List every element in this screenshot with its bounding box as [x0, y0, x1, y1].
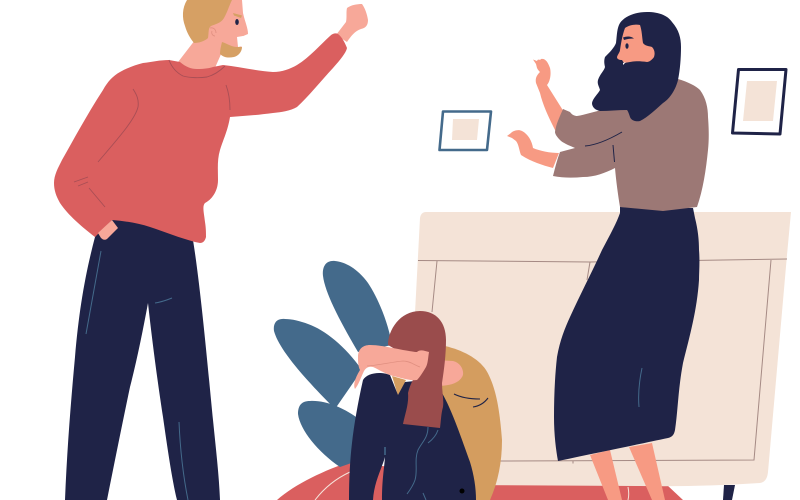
standing woman: skirt — [554, 207, 699, 461]
standing woman: legs — [590, 443, 665, 500]
seated woman: arms — [354, 345, 429, 389]
man: neck and face — [175, 0, 248, 72]
standing woman: top — [553, 79, 709, 211]
picture frame: navy — [732, 70, 786, 134]
standing woman: face — [617, 25, 655, 65]
seated woman: dark outfit — [349, 373, 476, 500]
man: raised fist — [336, 4, 368, 42]
sofa — [410, 212, 791, 486]
seated woman: hair — [388, 311, 446, 428]
bean bag — [430, 346, 502, 500]
man: beard — [220, 42, 242, 58]
angry man — [54, 0, 368, 500]
seated woman — [349, 311, 476, 500]
standing woman: hair — [592, 12, 681, 121]
standing woman — [507, 12, 709, 500]
plant leaves — [274, 261, 392, 467]
man: sweater — [54, 33, 347, 243]
man: hand in pocket — [98, 220, 118, 240]
man: eyebrow — [233, 13, 242, 18]
man: trousers — [65, 212, 220, 500]
sofa leg — [723, 485, 735, 500]
standing woman: lower arm — [507, 130, 559, 168]
standing woman: raised arm — [533, 59, 564, 132]
man: hair — [183, 0, 232, 43]
picture frame: blue — [440, 112, 491, 150]
rug — [277, 461, 683, 500]
seated woman: orange gap — [392, 376, 406, 396]
seated woman: knee — [436, 360, 463, 386]
